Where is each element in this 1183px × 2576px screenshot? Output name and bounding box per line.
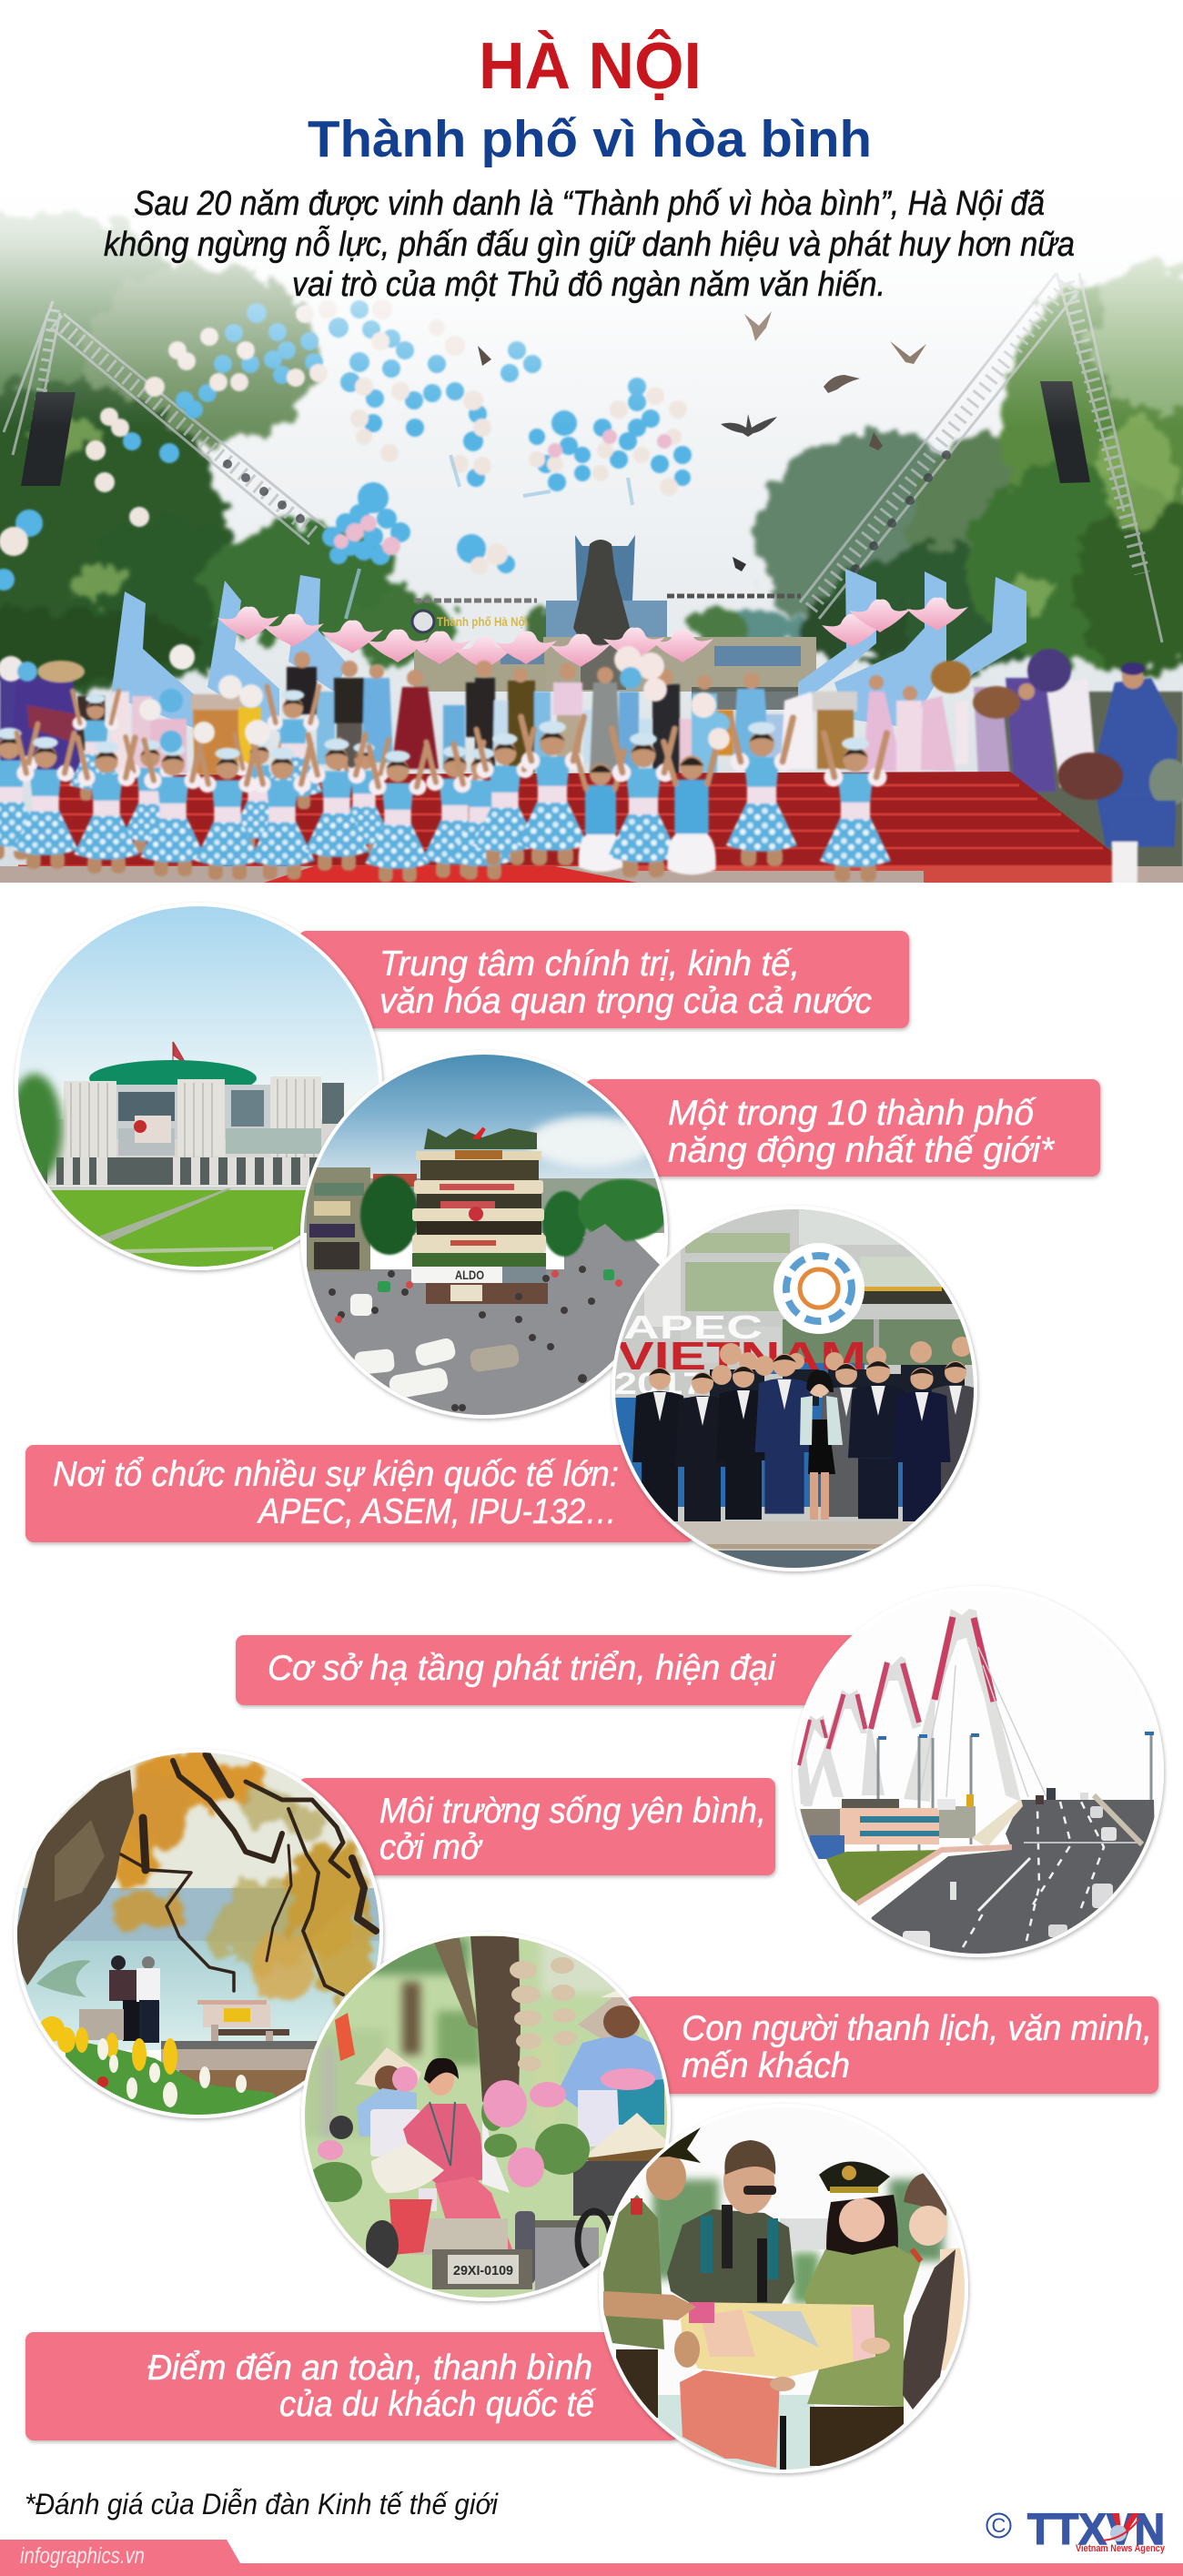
copyright mark: C [992, 2514, 1006, 2537]
intro paragraph: không ngừng nỗ lực, phấn đấu gìn giữ danh hiệu và phát huy hơn nữa [104, 224, 1075, 264]
cyclo frame and plate [366, 2199, 535, 2289]
conical hat [371, 2143, 444, 2193]
paper lotus flowers [217, 598, 968, 670]
roadside buildings [799, 1794, 976, 1859]
callout: elegant, civilised, hospitable people: mến khách [682, 2046, 850, 2086]
callout: peaceful, open living environment: cởi mở [379, 1828, 483, 1867]
callout: peaceful, open living environment: Môi trường sống yên bình, [379, 1792, 766, 1831]
left cyclo driver [329, 2047, 421, 2157]
subtitle: Thành phố vì hòa bình [308, 110, 872, 168]
title: HÀ NỘI [479, 29, 702, 103]
photo circle: APEC Vietnam delegates: VIETNAM [617, 1334, 866, 1379]
agency initials: TTXVN [1027, 2506, 1165, 2554]
globe emblem [1103, 2513, 1139, 2541]
balloons [0, 299, 692, 591]
callout: safe, peaceful destination: của du khách quốc tế [279, 2385, 596, 2424]
city map [681, 2302, 875, 2378]
callout: peaceful, open living environment [298, 1778, 775, 1875]
callout: international events: APEC, ASEM, IPU-132… [257, 1492, 617, 1531]
tree trunk and hanging bells [470, 1936, 521, 2102]
woman delegate in floral jacket [800, 1370, 843, 1520]
willow leaves [36, 1960, 91, 1997]
callout: international events: Nơi tổ chức nhiều sự kiện quốc tế lớn: [53, 1455, 619, 1494]
cyclo driver right [535, 1985, 666, 2291]
guests on stage [0, 649, 1183, 883]
lotus flowers and leaves [308, 2066, 590, 2202]
photo circle: cyclo with woman in pink ao dai [301, 1932, 671, 2301]
blurred park background [304, 1938, 660, 2138]
callout: elegant, civilised, hospitable people [626, 1996, 1158, 2094]
cyclo frame and plate: 29XI-0109 [453, 2263, 513, 2278]
red flag [335, 2013, 355, 2061]
hero photo: commemoration ceremony [0, 209, 1183, 883]
callout: safe, peaceful destination [25, 2332, 679, 2440]
logo: TTXVN Vietnam News Agency [986, 2506, 1166, 2554]
callout: political, economic, cultural centre: Trung tâm chính trị, kinh tế, [379, 945, 800, 984]
agency name: Vietnam News Agency [1076, 2543, 1166, 2554]
callout: one of the 10 most dynamic cities [585, 1079, 1100, 1177]
footnote: *Đánh giá của Diễn đàn Kinh tế thế giới [25, 2488, 499, 2520]
footer band [0, 2540, 1183, 2576]
photo circle: Hoan Kiem intersection [300, 1051, 669, 1419]
park bench [197, 2000, 289, 2056]
balloon strings and paper streamers [346, 455, 632, 619]
musician in blue ao dai with drum [1057, 753, 1176, 885]
photo circle: APEC Vietnam delegates [612, 1206, 983, 1572]
back row delegates [710, 1337, 970, 1406]
blue stage backdrops [111, 569, 1026, 732]
photo circle: autumn tree at Hoan Kiem lake [9, 1749, 383, 2120]
woman officer [804, 2161, 921, 2466]
flying doves [478, 311, 926, 571]
hands holding the map [603, 2291, 890, 2391]
white fade behind the headline [0, 206, 1183, 415]
woman tourist [903, 2173, 966, 2409]
photo circle: APEC Vietnam delegates: 2017 [614, 1367, 705, 1401]
footer source text: infographics.vn [20, 2543, 145, 2569]
intro paragraph: vai trò của một Thủ đô ngàn năm văn hiến. [292, 266, 885, 304]
intro paragraph [104, 185, 1075, 304]
speakers [21, 381, 1090, 486]
copyright mark [986, 2513, 1010, 2537]
cable-stayed pylons [798, 1609, 1046, 1806]
tourist with camera straps [667, 2140, 794, 2470]
trunk and branches [9, 1754, 376, 1995]
Ly Thai To statue and monument: Thành phố Hà Nội [437, 614, 528, 629]
callout: political, economic, cultural centre [298, 931, 909, 1028]
red carpet steps [0, 772, 1183, 883]
callout: one of the 10 most dynamic cities: năng động nhất thế giới* [668, 1131, 1056, 1170]
callout: one of the 10 most dynamic cities: Một trong 10 thành phố [668, 1094, 1036, 1133]
callout: modern infrastructure: Cơ sở hạ tầng phát triển, hiện đại [268, 1649, 776, 1688]
callout: political, economic, cultural centre: văn hóa quan trọng của cả nước [379, 982, 872, 1021]
officer left [603, 2127, 701, 2418]
Ly Thai To statue and monument [412, 535, 816, 710]
front row delegates [632, 1354, 983, 1526]
photo circle: National Assembly building [7, 903, 382, 1270]
street lamps [877, 1732, 1154, 1851]
dancing children [0, 686, 891, 883]
photo circle: APEC Vietnam delegates: APEC [623, 1308, 763, 1346]
lakeside path and flower bed [39, 2016, 379, 2120]
stage trusses [4, 273, 1162, 642]
photo circle: Hoan Kiem intersection: ALDO [455, 1268, 484, 1282]
intro paragraph: Sau 20 năm được vinh danh là “Thành phố vì hòa bình”, Hà Nội đã [134, 185, 1045, 223]
photo circle: Nhat Tan bridge [793, 1586, 1164, 1965]
callout: elegant, civilised, hospitable people: Con người thanh lịch, văn minh, [682, 2009, 1152, 2048]
trees behind the square [0, 209, 1183, 692]
callout: safe, peaceful destination: Điểm đến an toàn, thanh bình [147, 2349, 592, 2388]
photo circle: police guiding tourists with a map [599, 2104, 968, 2473]
callout: modern infrastructure [236, 1635, 864, 1705]
woman in pink ao dai [403, 2058, 512, 2255]
expressway [855, 1788, 1158, 1965]
grass verge [826, 1847, 951, 1904]
callout: international events [25, 1445, 694, 1542]
couple by the lake [79, 1955, 160, 2043]
orange canopy [114, 1754, 376, 2002]
stage balloons [0, 644, 730, 753]
